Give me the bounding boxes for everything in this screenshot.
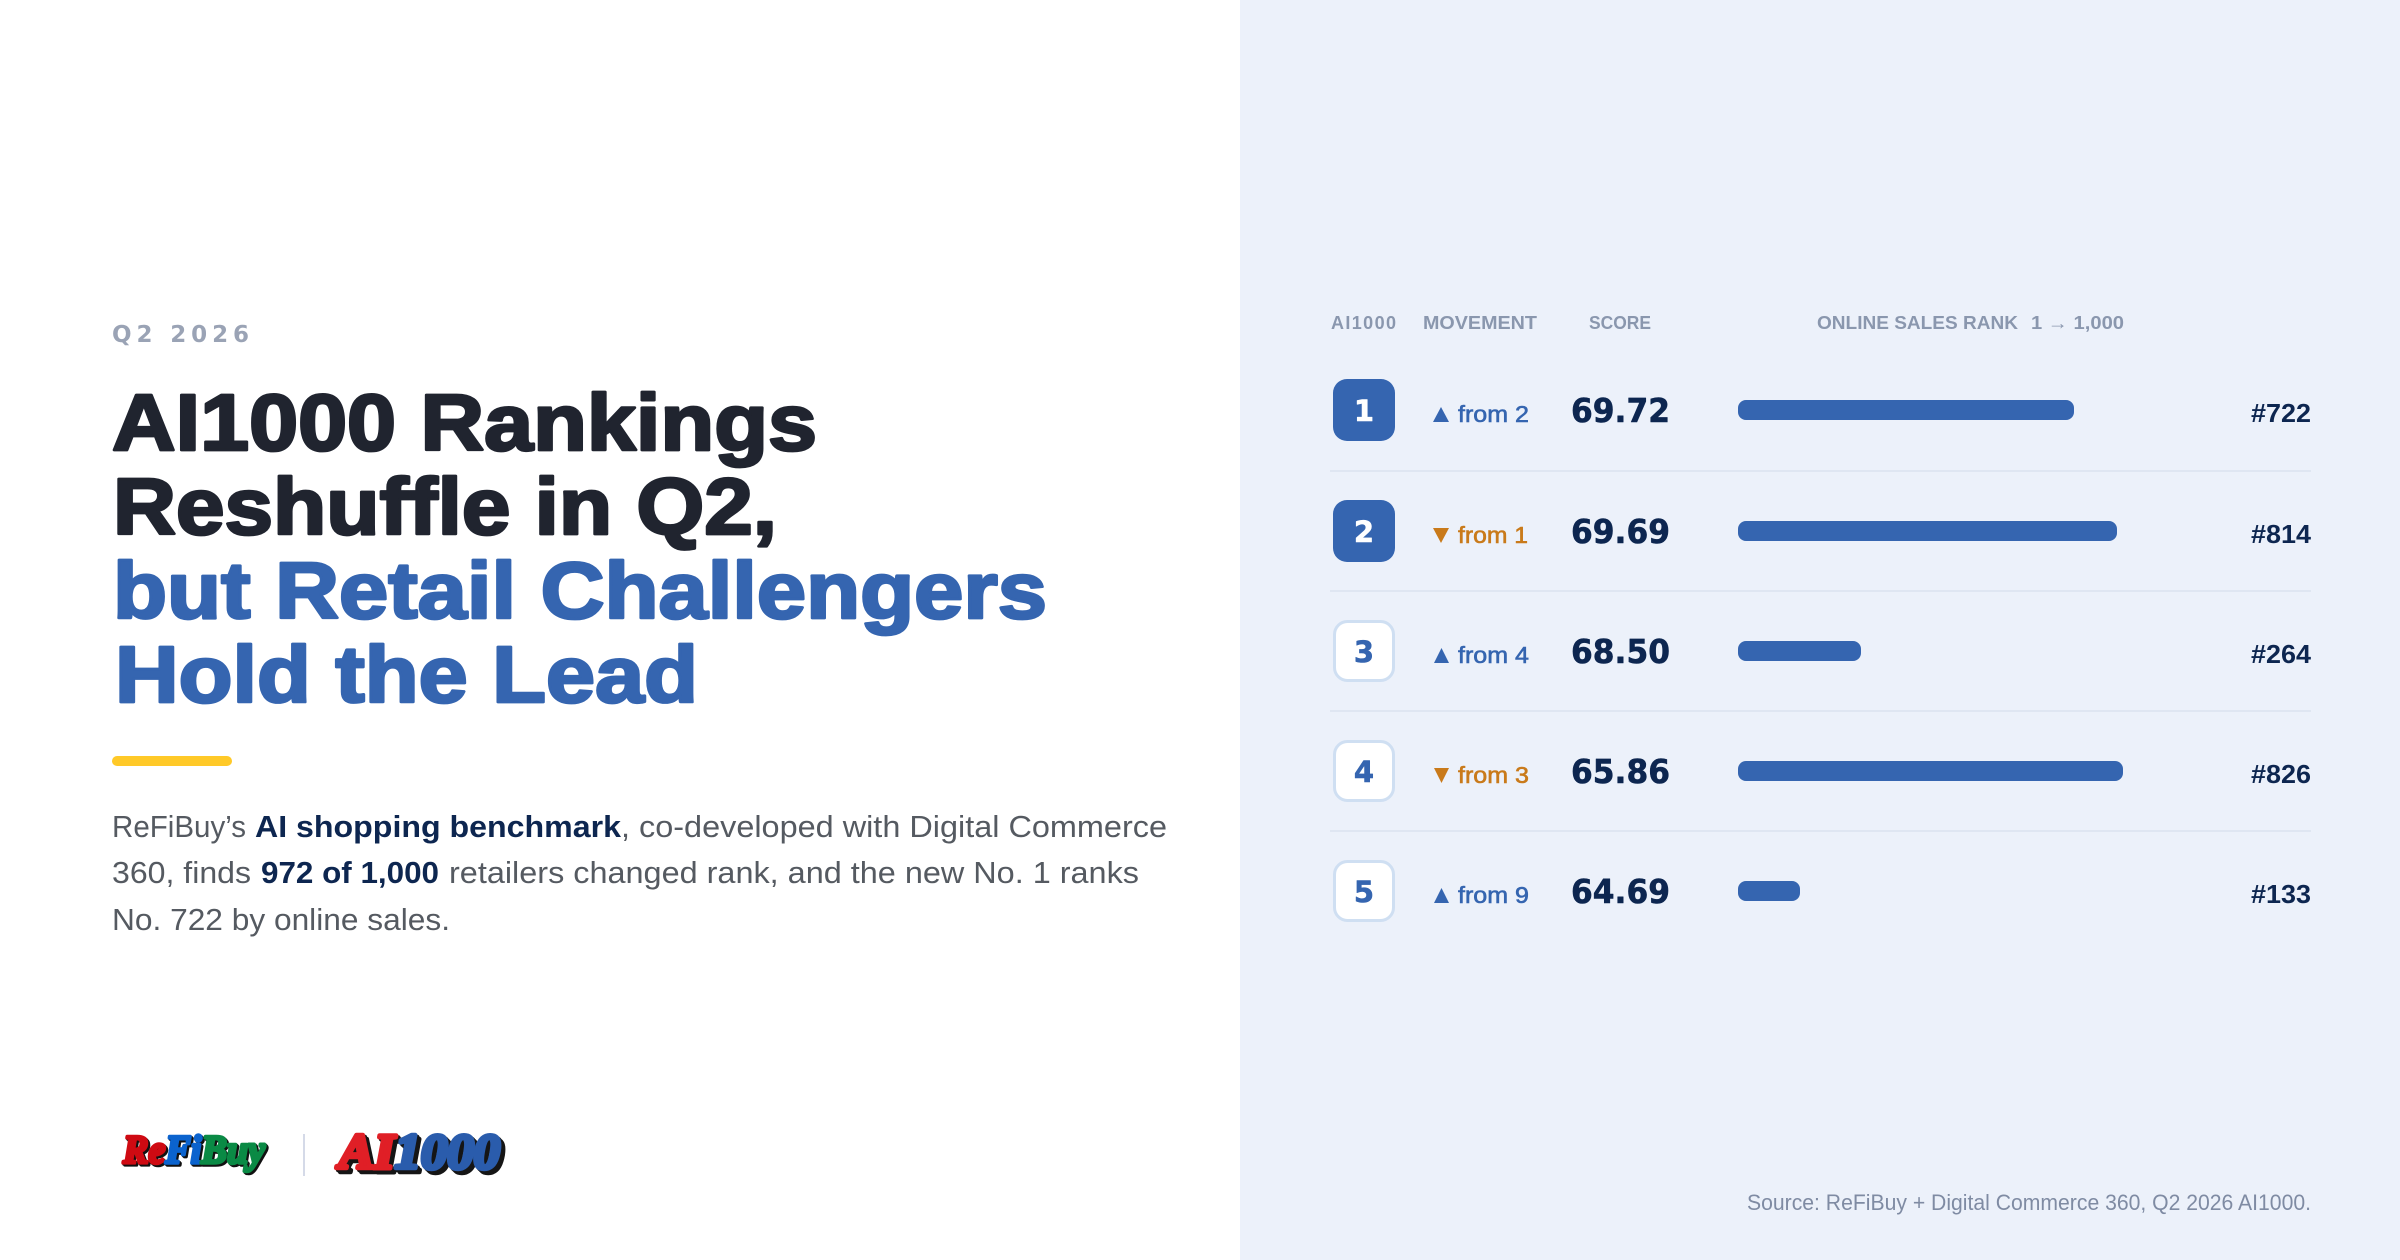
row 1 bbox=[1333, 379, 2311, 441]
row 4 bbox=[1334, 742, 2311, 800]
movement down from 1 bbox=[1433, 522, 1528, 548]
sales rank bar bbox=[1738, 400, 2074, 420]
title: Hold the Lead bbox=[115, 630, 698, 719]
rank badge 5: 5 bbox=[1354, 875, 1374, 909]
title: AI1000 Rankings bbox=[112, 378, 817, 467]
title bbox=[112, 378, 1047, 719]
table header bbox=[1331, 313, 2124, 333]
title: but Retail Challengers bbox=[113, 546, 1047, 635]
rank badge 3 bbox=[1334, 622, 1394, 680]
panel: left intro background bbox=[0, 0, 1240, 1260]
rank badge 2 bbox=[1333, 500, 1395, 562]
body paragraph: retailers changed rank, and the new No. 1 ranks bbox=[449, 855, 1139, 890]
row 2 bbox=[1333, 500, 2312, 562]
body paragraph: 360, finds bbox=[112, 855, 251, 890]
sales rank bar bbox=[1738, 521, 2117, 541]
movement down from 3 bbox=[1434, 762, 1529, 788]
rank badge 4: 4 bbox=[1354, 755, 1374, 789]
sales rank: #133 bbox=[2251, 879, 2311, 909]
row 5 bbox=[1334, 862, 2311, 920]
source note: Source: ReFiBuy + Digital Commerce 360, Q2 2026 AI1000. bbox=[1747, 1190, 2311, 1215]
logo: ReFiBuy: ReFiBuy bbox=[122, 1127, 265, 1172]
logo: AI1000: AI1000 bbox=[336, 1123, 500, 1179]
body paragraph: No. 722 by online sales. bbox=[112, 902, 450, 937]
table header: AI1000 bbox=[1331, 313, 1396, 333]
movement down from 3: from 3 bbox=[1458, 762, 1529, 788]
table header: 1 → 1,000 bbox=[2031, 313, 2124, 333]
rank badge 1 bbox=[1333, 379, 1395, 441]
rank badge 2: 2 bbox=[1354, 515, 1374, 549]
title: Reshuffle in Q2, bbox=[113, 462, 777, 551]
sales rank bar bbox=[1738, 761, 2123, 781]
logo divider bbox=[303, 1134, 305, 1176]
body paragraph: ReFiBuy’s bbox=[112, 809, 246, 844]
rank badge 3: 3 bbox=[1354, 635, 1374, 669]
sales rank bar bbox=[1738, 881, 1800, 901]
score: 68.50 bbox=[1571, 632, 1670, 671]
body paragraph bbox=[112, 809, 1167, 937]
table header: SCORE bbox=[1589, 313, 1651, 333]
body paragraph: AI shopping benchmark bbox=[255, 809, 622, 844]
body paragraph: 972 of 1,000 bbox=[261, 855, 439, 890]
eyebrow: quarter label: Q2 2026 bbox=[112, 322, 249, 348]
sales rank: #826 bbox=[2251, 759, 2311, 789]
movement up from 2: from 2 bbox=[1458, 401, 1529, 427]
accent bar bbox=[112, 756, 232, 766]
movement up from 4 bbox=[1434, 642, 1529, 668]
body paragraph: , co-developed with Digital Commerce bbox=[621, 809, 1167, 844]
movement up from 9: from 9 bbox=[1458, 882, 1529, 908]
sales rank: #814 bbox=[2251, 519, 2312, 549]
score: 69.69 bbox=[1571, 512, 1670, 551]
rank badge 5 bbox=[1334, 862, 1394, 920]
rank badge 1: 1 bbox=[1354, 394, 1374, 428]
rank badge 4 bbox=[1334, 742, 1394, 800]
table header: MOVEMENT bbox=[1423, 313, 1537, 333]
movement up from 2 bbox=[1433, 401, 1529, 427]
score: 65.86 bbox=[1571, 752, 1670, 791]
movement down from 1: from 1 bbox=[1458, 522, 1528, 548]
score: 69.72 bbox=[1571, 391, 1670, 430]
sales rank: #722 bbox=[2251, 398, 2311, 428]
movement up from 4: from 4 bbox=[1458, 642, 1529, 668]
table header: ONLINE SALES RANK bbox=[1817, 313, 2018, 333]
panel: right rankings background bbox=[1240, 0, 2400, 1260]
score: 64.69 bbox=[1571, 872, 1670, 911]
sales rank bar bbox=[1738, 641, 1861, 661]
row 3 bbox=[1334, 622, 2312, 680]
sales rank: #264 bbox=[2251, 639, 2312, 669]
movement up from 9 bbox=[1434, 882, 1529, 908]
